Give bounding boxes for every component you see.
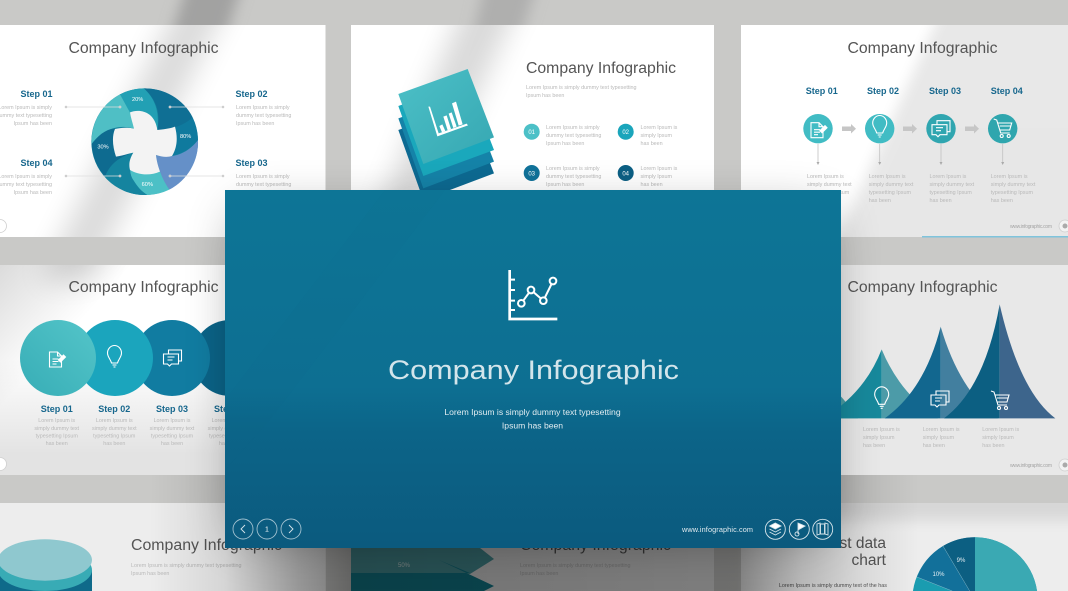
text block: step 04: Ipsum has been <box>14 190 52 196</box>
panel: cylinder slide <box>0 503 326 591</box>
step 02 icon circle <box>865 114 894 143</box>
text blocks: step descriptions: simply dummy text <box>869 182 914 188</box>
text block: circle step 02: has been <box>103 441 125 447</box>
list item 01: 01 <box>528 130 536 136</box>
text block: step 03: Lorem Ipsum is simply <box>236 174 290 180</box>
text block: arrows intro: Ipsum has been <box>520 571 558 577</box>
text blocks: step descriptions: typesetting Ipsum <box>869 190 911 196</box>
donut chart: 80% <box>180 134 191 140</box>
text blocks: step descriptions: typesetting Ipsum <box>807 190 850 196</box>
heading: pie slide title <box>820 535 887 569</box>
list item 03: Ipsum has been <box>546 182 584 188</box>
list item 03 <box>524 165 601 188</box>
text block: cylinder intro <box>131 563 242 577</box>
text block: step 03: Ipsum has been <box>236 190 274 196</box>
pie chart: 9% <box>957 558 966 564</box>
peak chart <box>823 304 1055 418</box>
arrows between steps <box>842 124 979 134</box>
text block: circle step 04: typesetting Ipsum <box>209 434 252 440</box>
list item 04: has been <box>640 182 663 188</box>
text blocks: step descriptions: has been <box>869 198 891 204</box>
list item 02: 02 <box>622 130 630 136</box>
text blocks: step descriptions: simply dummy text <box>930 182 975 188</box>
step labels: Step 01 <box>806 86 838 96</box>
text block: step 02: Step 02 <box>236 89 268 99</box>
text blocks: step descriptions: Lorem Ipsum is <box>991 174 1028 180</box>
text blocks: step descriptions: Lorem Ipsum is <box>869 174 906 180</box>
pie chart <box>913 537 1037 591</box>
text block: circle step 03: Lorem Ipsum is <box>154 418 191 424</box>
heading: donut slide title: Company Infographic <box>68 40 219 57</box>
text block: circle step 04: simply dummy text <box>208 426 253 432</box>
text block: circle step 01: typesetting Ipsum <box>36 434 78 440</box>
stems <box>816 144 1004 165</box>
text block: step 03: Step 03 <box>236 158 268 168</box>
text blocks: step descriptions: has been <box>930 198 952 204</box>
panel: arrows slide <box>351 503 714 591</box>
list item 01: dummy text typesetting <box>546 133 601 139</box>
floor shadow under the title card <box>0 475 1068 591</box>
illustration: stacked squares <box>398 69 494 200</box>
heading: process slide title: Company Infographic <box>848 40 998 57</box>
heading: cylinder slide title: Company Infographic <box>131 537 282 554</box>
text block: circle step 04: Lorem Ipsum is <box>212 418 249 424</box>
heading: stacked squares slide title: Company Infographic <box>526 60 676 77</box>
heading: peaks slide title: Company Infographic <box>848 279 998 296</box>
navigation buttons: 1 <box>265 526 269 534</box>
callouts: donut connector lines <box>65 106 224 177</box>
text block: step 02: Ipsum has been <box>236 121 274 127</box>
text block: circle step 04: Step 04 <box>214 404 246 414</box>
circles row <box>20 320 268 396</box>
pie chart: 10% <box>932 572 945 578</box>
step labels: Step 04 <box>991 86 1023 96</box>
text blocks: peak descriptions: has been <box>923 443 945 449</box>
text block: circle step 02: Step 02 <box>98 404 130 414</box>
text block: circle step 02: simply dummy text <box>92 426 137 432</box>
text block: circle step 03: simply dummy text <box>150 426 195 432</box>
text block: circle step 04: has been <box>219 441 241 447</box>
icon buttons <box>765 519 833 539</box>
step 04 icon circle <box>988 114 1017 143</box>
panel: process steps slide <box>741 25 1068 238</box>
diagonal sheen <box>225 190 445 470</box>
list item 04: simply Ipsum <box>640 174 672 180</box>
text block: cylinder intro: Lorem Ipsum is simply dummy text typesetting <box>131 563 242 569</box>
text block: circle step 03: has been <box>161 441 183 447</box>
heading: arrows slide title: Company Infographic <box>520 537 671 554</box>
text block: circle step 01: Step 01 <box>41 404 73 414</box>
text blocks: step descriptions: typesetting Ipsum <box>930 190 972 196</box>
footer url: www.infographic.com <box>1010 224 1052 230</box>
donut chart: 30% <box>97 145 109 151</box>
text block: step 01: Ipsum has been <box>14 121 52 127</box>
list item 04: 04 <box>622 171 630 177</box>
text block: intro <box>526 85 637 99</box>
panel: peaks slide <box>741 265 1068 475</box>
footer url: www.infographic.com <box>681 525 753 534</box>
list item 04: Lorem Ipsum is <box>640 166 678 172</box>
icon: page next button <box>0 458 6 470</box>
text blocks: step descriptions: typesetting Ipsum <box>991 190 1033 196</box>
text block: pie description: Lorem Ipsum is simply dummy text of the has <box>779 583 887 589</box>
donut chart: 60% <box>142 182 153 188</box>
text block: intro: Ipsum has been <box>526 93 564 99</box>
text block: step 02: Lorem Ipsum is simply <box>236 105 290 111</box>
text block: circle step 02: Lorem Ipsum is <box>96 418 133 424</box>
main panel drop shadow <box>240 215 826 535</box>
illustration: stacked cylinder <box>0 539 92 591</box>
panel: pie chart slide <box>741 503 1068 591</box>
icon: line chart <box>510 270 557 319</box>
text blocks: peak descriptions: Lorem Ipsum is <box>863 427 900 433</box>
text block: step 04 <box>0 158 52 196</box>
text blocks: peak descriptions: simply Ipsum <box>863 435 895 441</box>
list item 01: Ipsum has been <box>546 141 584 147</box>
list item 03: 03 <box>528 171 536 177</box>
list item 01 <box>524 124 601 147</box>
text block: subtitle: Lorem Ipsum is simply dummy text typesetting <box>444 407 621 417</box>
list item 02 <box>618 124 678 147</box>
text blocks: peak descriptions <box>863 427 1019 449</box>
text block: circle step 01: has been <box>46 441 68 447</box>
list item 02: has been <box>640 141 663 147</box>
text blocks: peak descriptions: Lorem Ipsum is <box>982 427 1019 433</box>
text block: subtitle <box>444 407 621 430</box>
text block: step 03 <box>236 158 291 196</box>
heading: circles slide title: Company Infographic <box>68 279 219 296</box>
list item 02: simply Ipsum <box>640 133 672 139</box>
heading: pie slide title: chart <box>852 552 887 569</box>
heading: main title: Company Infographic <box>388 355 679 385</box>
icon: footer badge <box>1059 220 1068 232</box>
list item 01: Lorem Ipsum is simply <box>546 125 600 131</box>
text block: intro: Lorem Ipsum is simply dummy text typesetting <box>526 85 637 91</box>
text block: circle step 03: Step 03 <box>156 404 188 414</box>
icon: footer badge <box>1059 459 1068 471</box>
panel: stacked squares slide <box>351 25 714 237</box>
text block: step 02: dummy text typesetting <box>236 113 291 119</box>
step 03 icon circle <box>926 114 956 143</box>
accent line <box>922 236 1068 238</box>
text block: circle step 01 <box>34 404 80 447</box>
step labels: Step 03 <box>929 86 961 96</box>
step labels: Step 02 <box>867 86 899 96</box>
list item 04 <box>618 165 678 188</box>
text block: cylinder intro: Ipsum has been <box>131 571 169 577</box>
text block: subtitle: Ipsum has been <box>502 420 563 430</box>
text block: step 01: Step 01 <box>20 89 52 99</box>
navigation buttons <box>233 519 301 539</box>
text block: circle step 03 <box>150 404 195 447</box>
text block: step 01 <box>0 89 52 127</box>
text blocks: step descriptions: Lorem Ipsum is <box>930 174 967 180</box>
text block: circle step 01: simply dummy text <box>34 426 80 432</box>
text blocks: peak descriptions: Lorem Ipsum is <box>923 427 960 433</box>
text blocks: step descriptions <box>807 174 1036 204</box>
panel: donut chart slide <box>0 25 326 237</box>
text block: circle step 04 <box>208 404 253 447</box>
text block: arrows intro: Lorem Ipsum is simply dummy text typesetting <box>520 563 631 569</box>
text block: circle step 02: typesetting Ipsum <box>93 434 136 440</box>
text blocks: step descriptions: simply dummy text <box>807 182 852 188</box>
text blocks: step descriptions: simply dummy text <box>991 182 1036 188</box>
text block: arrows intro <box>520 563 631 577</box>
step labels <box>806 86 1023 96</box>
text blocks: peak descriptions: has been <box>982 443 1004 449</box>
text block: step 04: Step 04 <box>20 158 52 168</box>
text block: circle step 02 <box>92 404 137 447</box>
arrow bands: 50% <box>398 563 411 569</box>
text block: circle step 03: typesetting Ipsum <box>151 434 194 440</box>
icon: page next button <box>0 220 6 232</box>
arrow bands <box>351 540 494 591</box>
heading: pie slide title: Best data <box>820 535 886 552</box>
text block: step 02 <box>236 89 291 127</box>
text block: step 03: dummy text typesetting <box>236 182 291 188</box>
list item 03: dummy text typesetting <box>546 174 601 180</box>
text blocks: peak descriptions: has been <box>863 443 885 449</box>
text blocks: peak descriptions: simply Ipsum <box>923 435 955 441</box>
donut chart: 20% <box>132 97 143 103</box>
text blocks: step descriptions: Lorem Ipsum is <box>807 174 844 180</box>
list item 03: Lorem Ipsum is simply <box>546 166 600 172</box>
list item 02: Lorem Ipsum is <box>640 125 678 131</box>
text block: circle step 01: Lorem Ipsum is <box>38 418 75 424</box>
step 01 icon circle <box>803 114 833 143</box>
panel: central title card <box>225 190 841 548</box>
text blocks: step descriptions: has been <box>991 198 1013 204</box>
text blocks: peak descriptions: simply Ipsum <box>982 435 1014 441</box>
footer url: www.infographic.com <box>1010 463 1052 469</box>
panel: overlapping circles slide <box>0 265 326 475</box>
donut chart <box>91 88 198 195</box>
